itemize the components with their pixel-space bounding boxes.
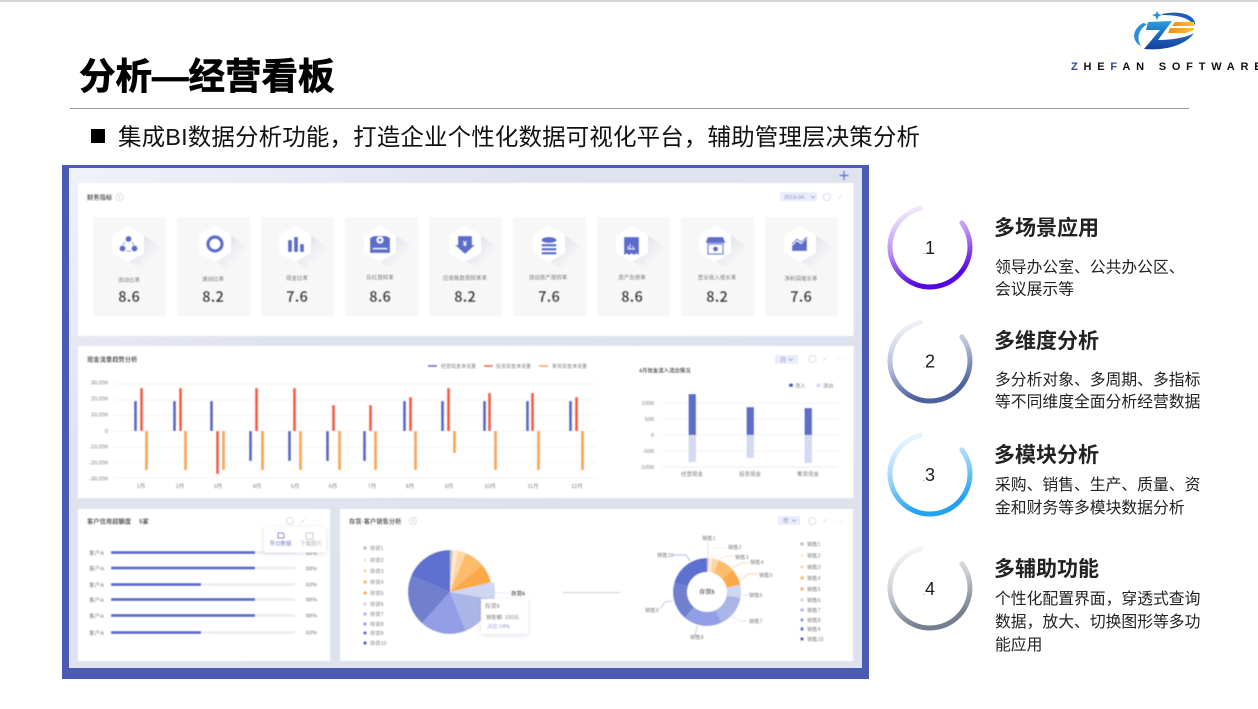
legend: sales: 销售1 [807, 540, 821, 548]
body 1: 领导办公室、公共办公区、 [995, 258, 1185, 276]
KPI card 5 [429, 217, 502, 316]
panel: cash flow trend [78, 346, 854, 498]
ring 1 [890, 208, 970, 287]
bar chart: monthly cash flow: 1月 [137, 483, 145, 490]
tooltip: inventory 6: 占比:14% [487, 622, 510, 630]
legend: sales: 销售8 [807, 616, 821, 624]
legend: inventory: 存货9 [370, 629, 384, 637]
ring 2 [890, 322, 970, 401]
KPI card 2: 8.2 [202, 286, 224, 307]
donut labels: 销售9 [645, 606, 659, 614]
legend: inventory: 存货2 [370, 556, 384, 564]
stacked bar chart: April cash flow: 0 [651, 433, 654, 439]
KPI card 5: 应收账款周转率率 [443, 274, 487, 282]
body 4: 能应用 [995, 635, 1042, 654]
ring 3 [890, 435, 970, 514]
pie chart: inventory [408, 550, 495, 634]
KPI card 2: 速动比率 [202, 275, 224, 283]
bar chart: monthly cash flow: 20,000 [91, 396, 108, 402]
period selector: month [775, 355, 798, 364]
KPI card 3 [261, 217, 334, 316]
bar chart: monthly cash flow: 3月 [214, 483, 222, 490]
number 3: .3 [923, 465, 935, 485]
number 4: .4 [923, 579, 935, 599]
bar chart: monthly cash flow: 0 [105, 429, 108, 435]
KPI card 8: 8.2 [706, 286, 728, 307]
legend: cash flow: 投资现金净流量 [496, 363, 531, 370]
body 3 [995, 476, 1200, 517]
progress bars: customers: 60% [306, 582, 317, 588]
KPI card 9 [765, 217, 838, 316]
panel heading: financial indicators: 财务指标 [87, 192, 113, 201]
legend: sales [800, 540, 824, 643]
panel heading: inventory customer sales: 存货-客户销售分析 [349, 516, 402, 526]
subtitle with bullet: 集成BI数据分析功能，打造企业个性化数据可视化平台，辅助管理层决策分析 [118, 118, 920, 152]
legend: sales: 销售7 [807, 606, 821, 614]
legend: cash flow: 经营现金净流量 [441, 363, 476, 370]
export popup: 导出数据 [269, 540, 292, 548]
KPI card 7 [597, 217, 670, 316]
bar chart: monthly cash flow: 5月 [291, 483, 299, 490]
bar chart: monthly cash flow: 11月 [527, 483, 539, 490]
legend: sales: 销售10 [807, 635, 824, 643]
KPI card 7: 资产负债率 [618, 274, 646, 282]
KPI card 8 [681, 217, 754, 316]
progress bars: customers: 客户A [89, 612, 104, 620]
legend: inflow and outflow [789, 382, 834, 390]
donut chart: sales [673, 558, 741, 626]
number 2: .2 [923, 352, 935, 372]
KPI card 9: 净利润增长率 [784, 274, 818, 282]
bar chart: monthly cash flow: -30,000 [89, 476, 108, 482]
feature 1: multi-scenario [890, 208, 1185, 298]
progress bars: customers: 客户A [89, 581, 104, 589]
stacked bar chart: April cash flow: -1000 [640, 465, 654, 471]
period selector: year: 年 [783, 517, 789, 525]
body 1 [995, 258, 1185, 298]
toolbar icons [809, 518, 844, 524]
progress bars: customers: 客户A [89, 629, 104, 637]
bar chart: monthly cash flow: 7月 [368, 483, 376, 490]
heading 1: 多场景应用 [994, 216, 1099, 240]
bar chart: monthly cash flow: -20,000 [89, 460, 108, 466]
toolbar icons [824, 194, 842, 200]
legend: inventory: 存货5 [370, 589, 384, 597]
panel heading: customer credit: 5家 [139, 516, 150, 526]
progress bars: customers: 客户A [89, 596, 104, 604]
legend: cash flow [428, 363, 587, 370]
period selector: 2019-04 [784, 195, 804, 201]
add button [840, 171, 848, 180]
number 1: .1 [923, 238, 935, 258]
stacked bar chart: April cash flow: 500 [645, 417, 654, 423]
progress bars: customers: 88% [306, 614, 317, 620]
title: 分析—经营看板 [79, 56, 334, 97]
KPI card 1: 8.6 [118, 286, 140, 307]
heading 4: 多辅助功能 [994, 557, 1099, 581]
donut labels: 销售6 [749, 591, 763, 599]
stacked bar chart: April cash flow: -500 [643, 449, 654, 455]
tooltip: inventory 6: 存货6 [485, 602, 500, 610]
bar chart: monthly cash flow: 10,000 [91, 412, 108, 418]
legend: sales: 销售6 [807, 596, 821, 604]
progress bars: customers: 88% [306, 598, 317, 604]
legend: sales: 销售5 [807, 585, 821, 593]
period selector [780, 192, 817, 201]
feature 2: multi-dimension [890, 322, 1201, 411]
feature 3: multi-module [890, 435, 1200, 517]
body 4: 个性化配置界面，穿透式查询 [995, 586, 1200, 609]
top edge line [0, 0, 1258, 2]
panel: financial indicators [78, 183, 854, 336]
donut labels [645, 534, 773, 641]
connector between charts [563, 592, 620, 594]
KPI card 9: 7.6 [790, 286, 812, 307]
body 4 [995, 586, 1200, 654]
stacked bar chart: April cash flow: 经营现金 [681, 470, 703, 478]
KPI card 4: 8.6 [369, 286, 391, 307]
progress bars: customers: 60% [306, 630, 317, 636]
bar chart: monthly cash flow: 2月 [176, 483, 184, 490]
KPI card 4: 存红周转率 [366, 274, 394, 282]
info icon [410, 518, 416, 524]
stacked bar chart: April cash flow: 1000 [642, 401, 654, 407]
progress bars: customers: 客户A [89, 549, 104, 557]
donut chart: sales: 存货6 [699, 588, 715, 596]
tooltip: inventory 6: 销售额: 100元 [486, 613, 520, 621]
panel heading: customer credit: 客户信用超额度 [87, 516, 132, 526]
KPI card 1 [93, 217, 166, 316]
bar chart: monthly cash flow [89, 380, 597, 490]
legend: inventory: 存货3 [370, 567, 384, 575]
donut labels: 销售10 [657, 551, 674, 559]
donut labels: 销售1 [702, 534, 716, 542]
heading 3: 多模块分析 [994, 444, 1099, 467]
bar chart: monthly cash flow: -10,000 [89, 444, 108, 450]
legend: cash flow: 筹资现金净流量 [552, 363, 587, 370]
KPI card 7: 8.6 [621, 286, 643, 307]
body 2 [995, 371, 1201, 411]
heading 2: 多维度分析 [994, 330, 1099, 353]
legend: inflow and outflow: 流出 [823, 382, 834, 390]
toolbar icons [286, 518, 321, 524]
KPI card 3: 现金比率 [286, 274, 308, 282]
bar chart: monthly cash flow: 8月 [406, 483, 414, 490]
donut labels: 销售2 [728, 543, 742, 551]
donut labels: 销售3 [735, 553, 749, 561]
dashboard screenshot frame [62, 165, 869, 679]
legend: inventory: 存货7 [370, 610, 384, 618]
KPI card 8: 营业收入增长率 [698, 274, 737, 282]
KPI card 3: 7.6 [286, 286, 308, 307]
donut labels: 销售8 [690, 633, 704, 641]
panel heading: cash flow trend: 现金流量趋势分析 [87, 354, 138, 364]
body 2: 多分析对象、多周期、多指标 [995, 371, 1201, 389]
stacked bar chart: April cash flow: 投资现金 [739, 470, 761, 478]
progress bars: customers [89, 549, 317, 637]
export popup: 下载图片 [300, 540, 322, 548]
toolbar icons [809, 356, 843, 362]
stacked bar chart: April cash flow: 筹资现金 [797, 470, 819, 478]
KPI card 6 [513, 217, 586, 316]
body 1: 会议展示等 [995, 280, 1074, 298]
KPI card 6: 7.6 [538, 286, 560, 307]
legend: sales: 销售9 [807, 625, 821, 633]
legend: inflow and outflow: 流入 [795, 382, 806, 390]
KPI card 4 [345, 217, 418, 316]
legend: sales: 销售2 [807, 552, 821, 560]
donut labels: 销售7 [749, 617, 763, 625]
KPI card 6: 流动资产周转率 [529, 274, 568, 282]
donut labels: 销售5 [759, 571, 773, 579]
panel: customer credit [78, 509, 330, 661]
KPI card 1: 流动比率 [118, 276, 140, 284]
logo: Zhefan Software [1071, 11, 1258, 73]
legend: sales: 销售4 [807, 574, 821, 582]
bar chart: monthly cash flow: 9月 [445, 483, 453, 490]
progress bars: customers: 客户A [89, 564, 104, 572]
legend: inventory: 存货6 [370, 600, 384, 608]
KPI card 2 [177, 217, 250, 316]
legend: inventory: 存货10 [370, 639, 387, 647]
bar chart: monthly cash flow: 10月 [484, 483, 496, 490]
panel heading: customer credit [87, 516, 150, 526]
chart heading: April inflow and outflow: 4月现金流入流出情况 [639, 366, 691, 374]
body 4: 数据，放大、切换图形等多功 [995, 609, 1200, 632]
KPI card 5: 8.2 [454, 286, 476, 307]
stacked bar chart: April cash flow [640, 394, 838, 478]
body 2: 等不同维度全面分析经营数据 [995, 393, 1201, 411]
bar chart: monthly cash flow: 12月 [571, 483, 583, 490]
donut labels: 销售4 [750, 558, 764, 566]
info icon [116, 194, 123, 200]
panel: inventory customer sales [340, 509, 853, 661]
body 3: 金和财务等多模块数据分析 [995, 499, 1185, 517]
bar chart: monthly cash flow: 4月 [253, 483, 261, 490]
body 3: 采购、销售、生产、质量、资 [995, 476, 1200, 494]
KPI card 5: ¥ [463, 241, 467, 248]
pie label: inventory 6: 存货6 [511, 590, 525, 598]
bar chart: monthly cash flow: 6月 [329, 483, 337, 490]
period selector: month: 月 [780, 357, 786, 364]
progress bars: customers: 88% [306, 566, 317, 572]
ring 4 [890, 549, 970, 628]
legend: sales: 销售3 [807, 563, 821, 571]
bar chart: monthly cash flow: 30,000 [91, 380, 108, 386]
pie label: inventory 6 [494, 590, 525, 598]
progress bars: customers: 88% [306, 551, 317, 557]
tooltip: inventory 6 [481, 599, 528, 634]
legend: inventory: 存货1 [370, 544, 384, 552]
feature 4: auxiliary functions [890, 549, 1200, 654]
export popup [264, 527, 326, 552]
legend: inventory [363, 544, 387, 647]
legend: inventory: 存货4 [370, 578, 384, 586]
title rule [70, 108, 1189, 109]
legend: inventory: 存货8 [370, 620, 384, 628]
period selector: year [778, 516, 800, 525]
